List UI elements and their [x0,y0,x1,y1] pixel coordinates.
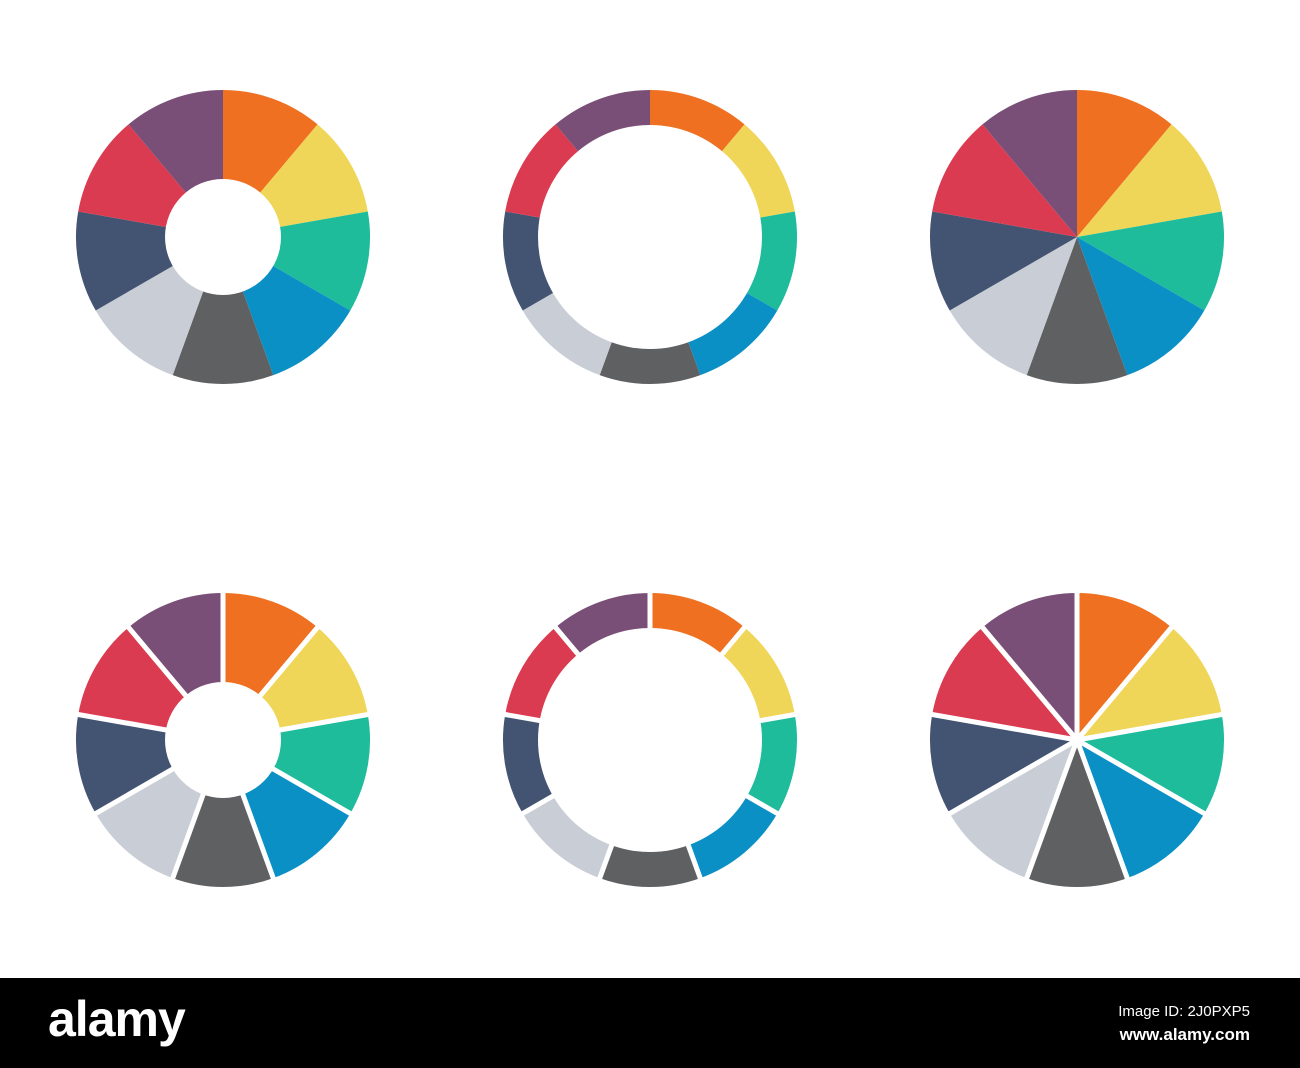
image id text: Image ID: 2J0PXP5 [1118,1003,1250,1020]
chart: donut with gaps bottom-left [75,590,371,887]
chart: ring top-middle [503,90,797,384]
chart: pie with gaps bottom-right [929,590,1225,887]
image id text: www.alamy.com [1120,1025,1250,1044]
chart: ring with gaps bottom-middle [502,590,798,887]
logo text: alamy [48,991,185,1047]
chart: donut top-left [76,90,370,384]
image id text [1118,1003,1250,1044]
footer bar [0,978,1300,1068]
chart: pie top-right [930,90,1224,384]
